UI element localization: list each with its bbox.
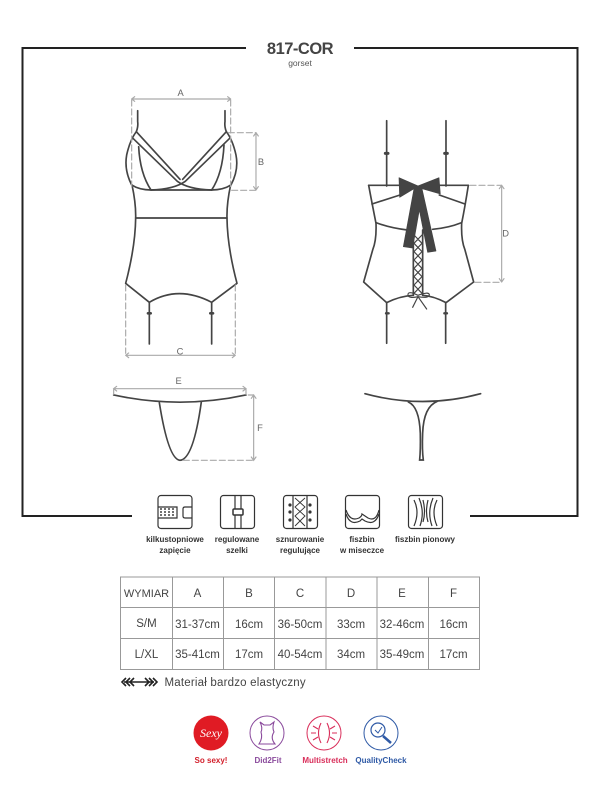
note text: Materiał bardzo elastyczny	[164, 677, 306, 689]
label: boning: fiszbin pionowy	[395, 535, 456, 544]
feature labels	[146, 535, 456, 555]
table text: 16cm	[235, 619, 263, 631]
table text: 17cm	[235, 649, 263, 661]
badge: Did2Fit: Did2Fit	[254, 756, 282, 765]
badge: So sexy: Sexy	[200, 726, 223, 740]
thong diagrams	[114, 376, 481, 460]
dimension labels: A	[178, 88, 185, 98]
table text: 16cm	[439, 619, 468, 631]
label: lacing: regulujące	[280, 546, 321, 555]
icon: stretch arrows	[122, 678, 157, 686]
table text: 34cm	[337, 649, 365, 661]
table text: C	[296, 588, 304, 600]
dimension labels E F: F	[257, 423, 263, 433]
table text: 36-50cm	[278, 619, 322, 631]
dimension labels: B	[258, 157, 264, 167]
table text: A	[194, 588, 202, 600]
bow	[399, 178, 440, 252]
label: closure: zapięcie	[159, 546, 191, 555]
table text: 32-46cm	[380, 619, 424, 631]
label: straps: szelki	[226, 546, 248, 555]
dimension C	[126, 285, 235, 358]
dimension B	[228, 133, 258, 190]
thong back	[365, 394, 481, 460]
badge: So sexy	[194, 716, 228, 765]
back corset diagram	[364, 121, 509, 343]
table text: 33cm	[337, 619, 365, 631]
table text: 35-49cm	[380, 649, 424, 661]
table text: 40-54cm	[278, 649, 322, 661]
table text: WYMIAR	[124, 588, 169, 600]
badge: Multistretch	[302, 716, 348, 765]
dimension labels	[177, 88, 264, 357]
table text: D	[347, 588, 355, 600]
icon: adjustable straps	[220, 496, 254, 528]
badge: Multistretch: Multistretch	[302, 756, 348, 765]
page frame	[22, 48, 578, 516]
icon: multi-step hook closure	[158, 496, 192, 528]
dimension A	[132, 97, 231, 187]
icon: vertical boning	[408, 496, 442, 528]
icon: adjustable lacing	[284, 496, 318, 528]
subtitle: gorset	[288, 58, 312, 68]
table text: B	[245, 588, 253, 600]
front corset diagram	[126, 88, 264, 358]
icon: cup underwire	[346, 496, 380, 528]
table grid	[120, 577, 480, 670]
badge: QualityCheck: QualityCheck	[355, 756, 407, 765]
dimension F	[183, 395, 256, 460]
badge: So sexy: So sexy!	[195, 756, 227, 765]
label: closure: kilkustopniowe	[146, 535, 204, 544]
size table	[120, 577, 480, 670]
thong front	[114, 395, 246, 460]
title: 817-COR	[267, 40, 334, 58]
dimension D	[470, 185, 504, 282]
label: straps: regulowane	[215, 535, 259, 544]
table text: L/XL	[135, 649, 159, 661]
badge: Did2Fit	[250, 716, 284, 765]
feature icons	[158, 496, 442, 528]
table text: E	[398, 588, 406, 600]
elastic material note	[122, 677, 306, 689]
dimension E	[114, 386, 246, 394]
label: cup wire: w miseczce	[339, 546, 385, 555]
table text: 17cm	[439, 649, 468, 661]
table text: 35-41cm	[175, 649, 220, 661]
dimension labels E F	[176, 376, 263, 433]
label: cup wire: fiszbin	[349, 535, 375, 544]
corset outline back	[364, 121, 474, 343]
dimension labels: C	[177, 347, 184, 357]
table text: S/M	[136, 618, 157, 630]
dimension labels E F: E	[176, 376, 182, 386]
badge: QualityCheck	[355, 716, 407, 765]
dimension label D: D	[502, 229, 509, 239]
table text: F	[450, 588, 457, 600]
table text: 31-37cm	[175, 619, 220, 631]
table text	[124, 588, 468, 661]
corset outline front	[126, 111, 237, 344]
label: lacing: sznurowanie	[276, 535, 324, 544]
